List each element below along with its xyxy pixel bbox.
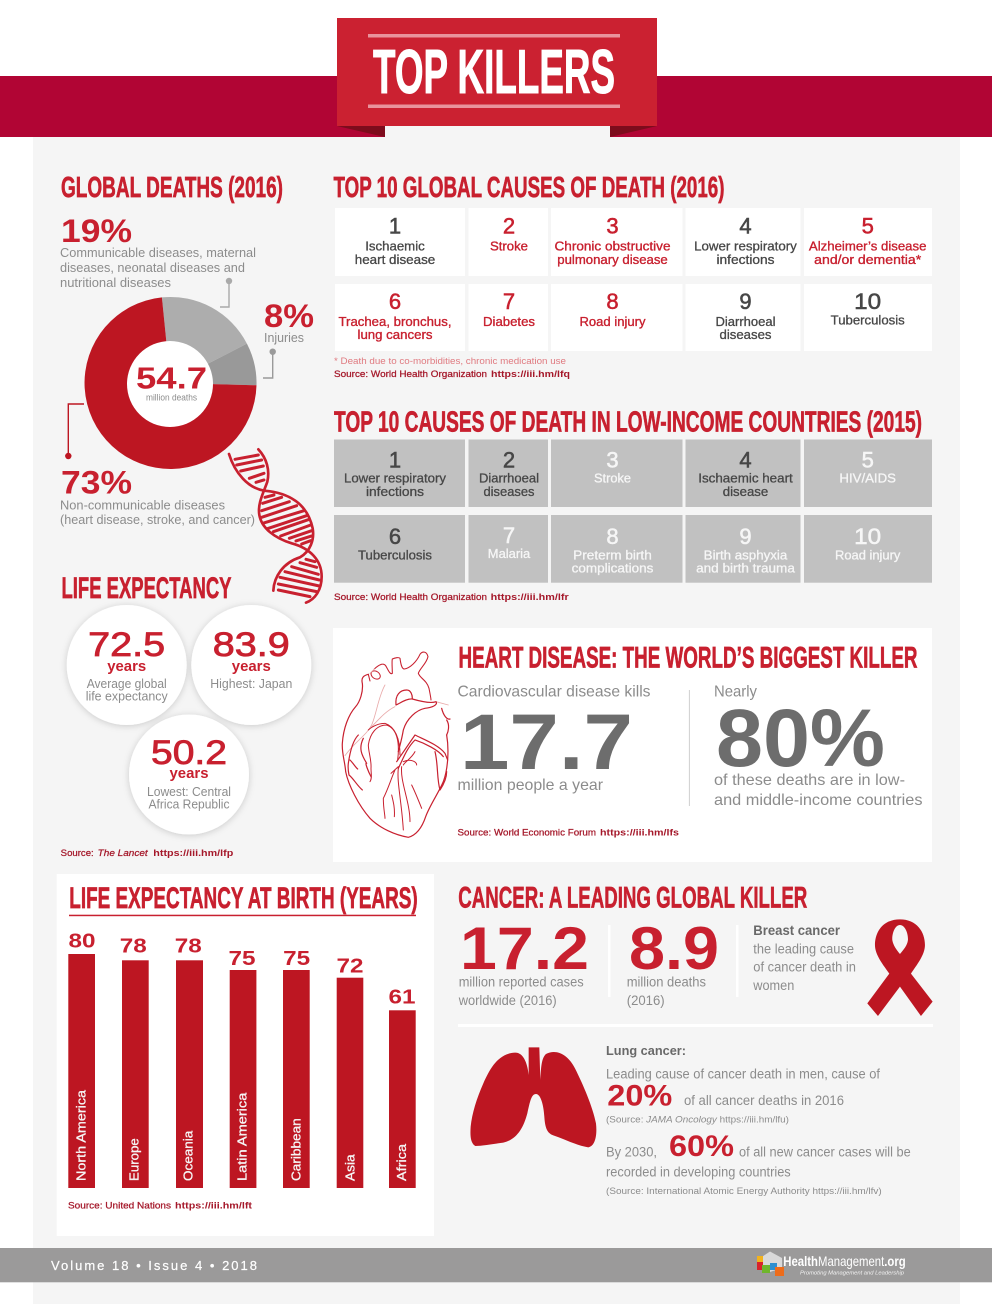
bar: Latin America	[228, 948, 256, 1188]
cause 3: Chronic obstructive	[554, 238, 670, 254]
circle: lowest Central Africa Republic: years	[170, 765, 208, 782]
text: breast cancer: the leading cause	[753, 941, 854, 956]
circle: average global: 72.5	[88, 626, 165, 664]
text: lung cancer: (Source: International Atomic Energy Authority https://iii.hm/lfv)	[606, 1186, 882, 1196]
source: WHO low-income: https://iii.hm/lfr	[491, 592, 569, 602]
cause 9	[716, 289, 776, 342]
text: reported cases	[458, 975, 584, 1008]
stat: 19 percent: 19%	[61, 213, 132, 249]
text: nearly: Nearly	[714, 684, 757, 701]
low-income 4: 4	[739, 447, 752, 472]
source: United Nations	[68, 1201, 252, 1211]
circle: highest Japan: Highest: Japan	[210, 677, 292, 691]
low-income 9: and birth trauma	[696, 561, 796, 576]
logo wordmark: HealthManagement.org	[783, 1253, 906, 1269]
cause 9: Diarrhoeal	[716, 314, 776, 329]
cause 5: 5	[862, 214, 874, 238]
cause 2	[490, 214, 528, 254]
cause 4: infections	[716, 252, 775, 267]
low-income 1: infections	[366, 484, 425, 499]
text: lung cancer: recorded in developing countries	[606, 1165, 791, 1180]
heading: top 10 global: TOP 10 GLOBAL CAUSES OF DEATH (2016)	[334, 172, 724, 204]
cause 6: 6	[389, 289, 401, 314]
low-income 9: Birth asphyxia	[704, 547, 788, 562]
icon: ribbon	[867, 919, 933, 1016]
low-income 2	[479, 447, 539, 499]
icon: cube	[757, 1252, 784, 1276]
leader: 19 percent	[220, 278, 232, 307]
title: TOP KILLERS	[373, 38, 615, 107]
bar: Europe: Europe	[127, 1138, 142, 1181]
low-income 3: 3	[606, 447, 619, 472]
cause 8	[580, 289, 646, 329]
leader: 8 percent	[263, 348, 276, 378]
source: United Nations: Source: United Nations	[68, 1201, 172, 1211]
text: lung cancer: (Source: JAMA Oncology https://iii.hm/lfu)	[606, 1115, 789, 1125]
low-income 8: Preterm birth	[573, 547, 652, 562]
stat: 17.2: 17.2	[460, 915, 589, 982]
bar chart	[68, 930, 416, 1188]
heading: life expectancy: LIFE EXPECTANCY	[62, 572, 232, 605]
circle: highest Japan	[191, 605, 311, 725]
text: lung cancer: By 2030,	[606, 1145, 657, 1160]
leader: 73 percent	[65, 404, 84, 459]
circle: lowest Central Africa Republic: Lowest: Central	[147, 785, 231, 799]
text: lung cancer: of all cancer deaths in 2016	[684, 1093, 844, 1108]
cause 6: Trachea, bronchus,	[338, 314, 452, 329]
text: lung cancer: of all new cancer cases will be	[739, 1145, 911, 1160]
bar: Latin America: 75	[228, 948, 256, 970]
source: WHO low-income: Source: World Health Organization	[334, 592, 487, 602]
source: WHO	[334, 369, 570, 379]
cause 3: 3	[606, 214, 619, 238]
bar: Africa	[388, 986, 416, 1188]
text: lung cancer	[606, 1043, 911, 1196]
panel: life expectancy	[61, 572, 311, 858]
low-income 3	[594, 447, 631, 486]
bar: North America: 80	[68, 930, 96, 952]
panel: heart disease	[333, 628, 932, 862]
circle: lowest Central Africa Republic: Africa Republic	[148, 798, 230, 812]
cause 9: 9	[739, 289, 752, 314]
cause 2: 2	[503, 214, 515, 238]
low-income 2: diseases	[484, 484, 535, 499]
panel: top 10 low-income	[334, 406, 932, 602]
low-income 2: Diarrhoeal	[479, 471, 539, 486]
logo: HealthManagement.org	[757, 1252, 906, 1276]
cause 10: Tuberculosis	[831, 312, 905, 327]
cause 1: 1	[389, 214, 401, 238]
text: communicable diseases	[60, 245, 256, 290]
panel: global deaths	[60, 172, 314, 527]
low-income 5: HIV/AIDS	[839, 471, 896, 486]
text: communicable diseases: Communicable diseases, maternal	[60, 245, 256, 260]
source: WEF: Source: World Economic Forum	[458, 827, 596, 837]
low-income 4: Ischaemic heart	[698, 471, 793, 486]
circle: average global: life expectancy	[86, 690, 168, 704]
footnote: * Death due to co-morbidities, chronic medication use	[334, 356, 566, 366]
cause 7	[483, 289, 536, 329]
text: low and middle income	[714, 772, 922, 809]
source: The Lancet	[61, 848, 234, 858]
source: The Lancet: https://iii.hm/lfp	[153, 848, 234, 858]
panel: cancer	[458, 881, 933, 1196]
text: million deaths: million deaths	[627, 975, 706, 990]
text: reported cases: million reported cases	[459, 975, 584, 990]
low-income 5: 5	[862, 447, 874, 472]
bar: Africa: 61	[388, 986, 416, 1008]
logo tagline: Promoting Management and Leadership	[800, 1270, 904, 1276]
bar: Oceania: 78	[175, 936, 202, 958]
bar: Caribbean	[283, 948, 310, 1188]
table cells	[334, 440, 932, 583]
source: United Nations: https://iii.hm/lft	[175, 1201, 252, 1211]
stat: 73 percent: 73%	[61, 464, 132, 500]
bar: Asia: Asia	[343, 1153, 358, 1181]
text: communicable diseases: nutritional diseases	[60, 275, 171, 290]
cause 5: Alzheimer’s disease	[809, 238, 926, 254]
source: WHO: https://iii.hm/lfq	[491, 369, 570, 379]
bar: Europe	[120, 936, 149, 1188]
source: WHO low-income	[334, 592, 569, 602]
stat: 17.7: 17.7	[460, 697, 633, 786]
text: breast cancer: women	[752, 978, 794, 993]
circle: average global: years	[107, 658, 146, 675]
low-income 5	[839, 447, 896, 486]
low-income 2: 2	[503, 447, 515, 472]
cause 3: pulmonary disease	[557, 252, 668, 267]
text: breast cancer	[752, 923, 856, 993]
cause 10	[831, 289, 905, 327]
table cells	[335, 208, 932, 351]
footer	[0, 1248, 992, 1282]
text: reported cases: worldwide (2016)	[458, 993, 557, 1008]
bar: Asia	[336, 955, 364, 1188]
stat: 8.9: 8.9	[629, 915, 719, 982]
text: low and middle income: of these deaths are in low-	[714, 772, 905, 789]
bar: Oceania: Oceania	[180, 1130, 195, 1181]
source: The Lancet: Source:	[61, 848, 94, 858]
issue line: Volume 18 • Issue 4 • 2018	[51, 1258, 257, 1273]
text: million deaths: (2016)	[627, 993, 665, 1008]
bar: Africa: Africa	[394, 1143, 409, 1181]
cause 1	[355, 214, 435, 267]
low-income 1: 1	[389, 447, 401, 472]
circle: highest Japan: 83.9	[213, 626, 290, 664]
stat: 8 percent: 8%	[264, 298, 314, 334]
cause 4: 4	[739, 214, 752, 238]
cause 7: Diabetes	[483, 314, 536, 329]
cause 6	[338, 289, 452, 342]
bar: Caribbean: 75	[283, 948, 310, 970]
icon: DNA helix	[229, 449, 322, 603]
panel: top 10 global causes	[334, 172, 932, 379]
source: The Lancet: The Lancet	[98, 848, 148, 858]
cause 9: diseases	[720, 327, 772, 342]
text: breast cancer: of cancer death in	[753, 960, 856, 975]
low-income 8	[572, 524, 654, 576]
text: non-communicable: Non-communicable diseases	[60, 498, 225, 512]
text: lung cancer: Leading cause of cancer death in men, cause of	[606, 1066, 880, 1081]
low-income 10: Road injury	[835, 547, 901, 562]
circle: lowest Central Africa Republic	[129, 714, 249, 834]
heading: life expectancy at birth: LIFE EXPECTANCY AT BIRTH (YEARS)	[69, 882, 418, 915]
low-income 6	[358, 524, 433, 562]
low-income 8: complications	[572, 561, 654, 576]
cause 7: 7	[503, 289, 515, 314]
low-income 6: 6	[389, 524, 401, 549]
circle: average global	[67, 605, 187, 725]
bar: Asia: 72	[336, 955, 364, 977]
text: low and middle income: and middle-income countries	[714, 792, 922, 809]
panel: life expectancy at birth	[57, 874, 434, 1236]
bar: North America	[68, 930, 96, 1188]
text: million people: million people a year	[458, 777, 604, 794]
cause 3	[554, 214, 670, 267]
donut chart	[85, 297, 257, 469]
text: cardiovascular: Cardiovascular disease kills	[458, 684, 650, 701]
text: million deaths	[627, 975, 706, 1008]
text: communicable diseases: diseases, neonatal diseases and	[60, 260, 245, 275]
cause 2: Stroke	[490, 238, 528, 254]
low-income 4: disease	[723, 484, 768, 499]
low-income 10	[835, 524, 901, 562]
circle: lowest Central Africa Republic: 50.2	[151, 734, 227, 772]
donut unit: million deaths	[146, 392, 197, 402]
bar: North America: North America	[73, 1089, 88, 1181]
stat: 80 percent: 80%	[716, 693, 885, 784]
low-income 9	[696, 524, 796, 576]
cause 5: and/or dementia*	[814, 252, 921, 267]
source: WEF: https://iii.hm/lfs	[600, 827, 679, 837]
donut total: 54.7	[136, 360, 207, 396]
cause 8: 8	[606, 289, 619, 314]
text: non-communicable	[60, 498, 255, 527]
low-income 7: 7	[503, 523, 515, 548]
low-income 1	[344, 447, 446, 499]
stat: 20 percent: 20%	[607, 1080, 672, 1113]
cause 4: Lower respiratory	[694, 238, 797, 254]
text: breast cancer: Breast cancer	[753, 923, 841, 938]
low-income 4	[698, 447, 793, 499]
icon: heart	[342, 652, 450, 837]
source: WHO: Source: World Health Organization	[334, 369, 487, 379]
cause 6: lung cancers	[358, 327, 433, 342]
header banner	[0, 18, 992, 137]
cause 10: 10	[854, 289, 881, 314]
low-income 10: 10	[854, 524, 881, 549]
cause 8: Road injury	[580, 314, 646, 329]
low-income 1: Lower respiratory	[344, 471, 446, 486]
low-income 8: 8	[606, 524, 619, 549]
low-income 7	[488, 523, 531, 561]
source: WEF	[458, 827, 679, 837]
text: lung cancer: Lung cancer:	[606, 1043, 686, 1058]
low-income 3: Stroke	[594, 471, 631, 486]
cause 1: Ischaemic	[365, 238, 425, 254]
stat: 60 percent: 60%	[669, 1130, 734, 1163]
bar: Latin America: Latin America	[235, 1092, 250, 1181]
low-income 9: 9	[739, 524, 752, 549]
bar: Oceania	[175, 936, 203, 1188]
circle: average global: Average global	[87, 677, 167, 691]
heading: global deaths: GLOBAL DEATHS (2016)	[61, 172, 283, 204]
low-income 6: Tuberculosis	[358, 547, 433, 562]
text: injuries: Injuries	[264, 330, 304, 345]
cause 5	[809, 214, 926, 267]
text: non-communicable: (heart disease, stroke, and cancer)	[60, 512, 255, 527]
cause 4	[694, 214, 797, 267]
bar: Europe: 78	[120, 936, 147, 958]
circle: highest Japan: years	[232, 658, 271, 675]
bar: Caribbean: Caribbean	[289, 1118, 304, 1181]
cause 1: heart disease	[355, 252, 435, 267]
low-income 7: Malaria	[488, 546, 531, 561]
icon: lungs	[470, 1047, 596, 1147]
